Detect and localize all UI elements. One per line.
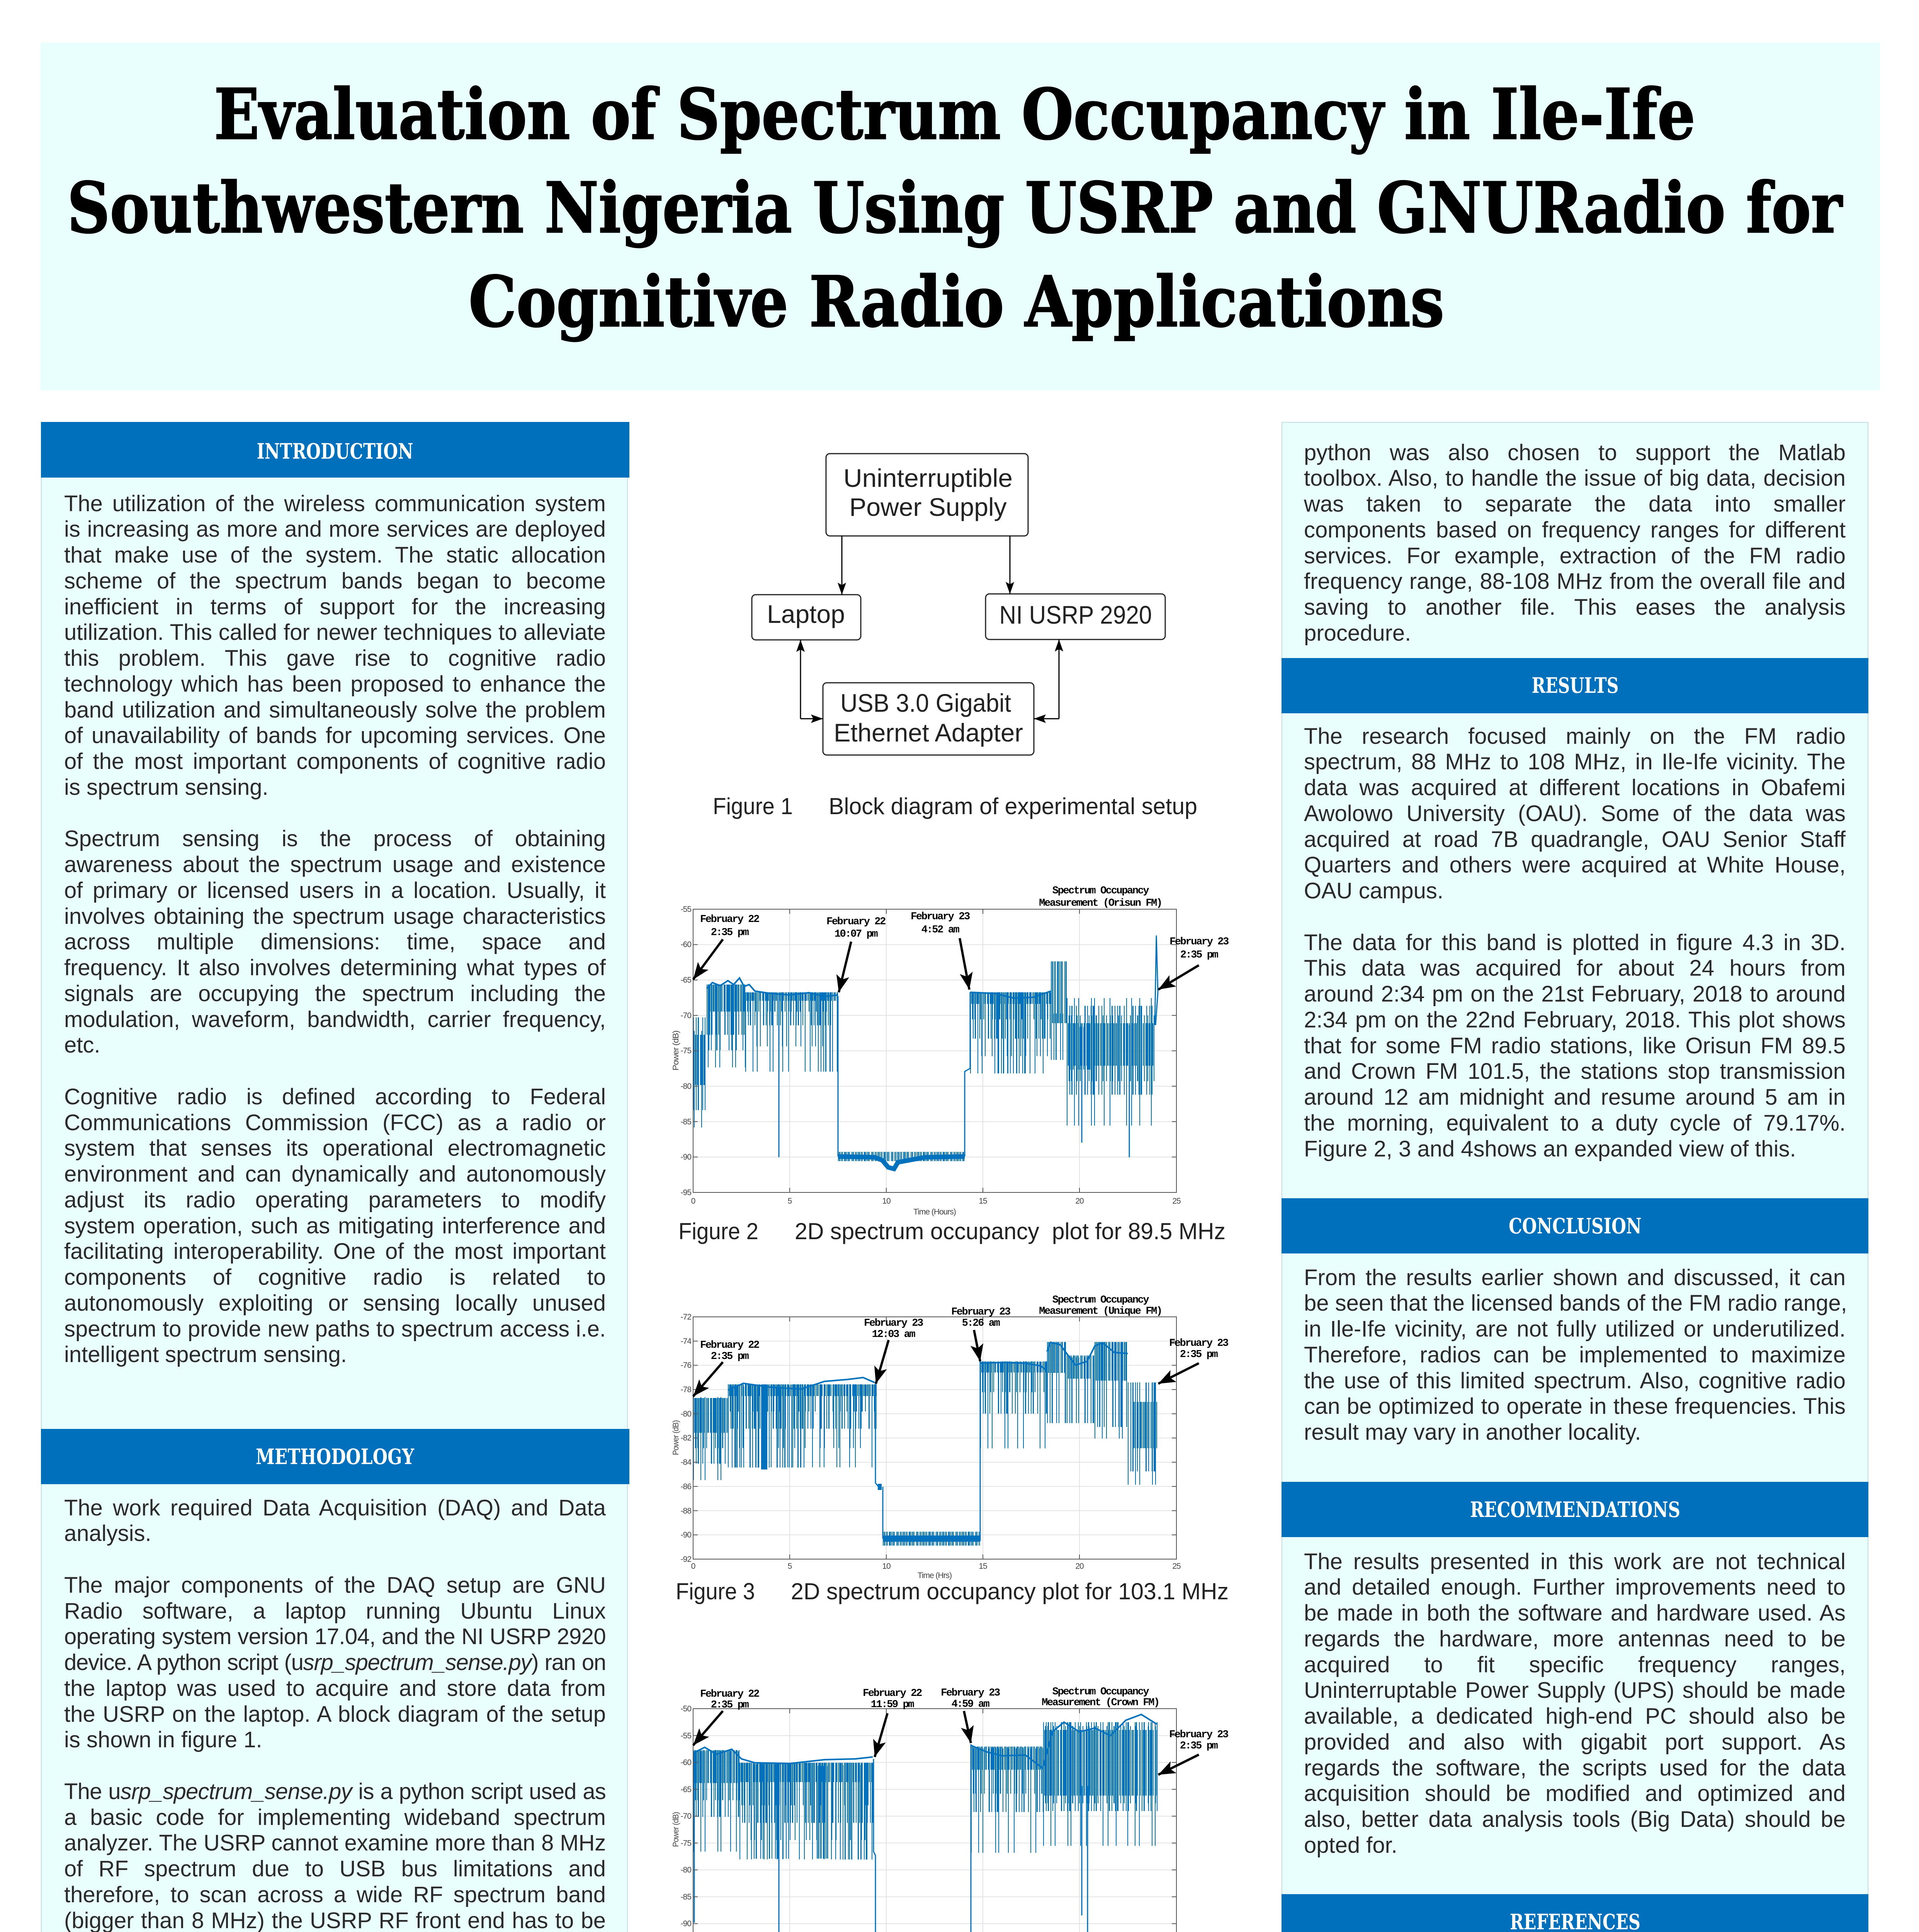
results text: around 2:34 pm on the 21st February, 2018 to around <box>1304 981 1846 1007</box>
axis labels: 25 <box>1172 1197 1181 1206</box>
box: uninterruptible power supply <box>826 454 1028 536</box>
axis labels: 5 <box>788 1197 792 1206</box>
box: NI USRP 2920 <box>986 594 1165 639</box>
arrow: USRP to adapter <box>1034 718 1059 719</box>
recommendations text: regards the hardware, more antennas need to be <box>1304 1626 1846 1651</box>
methodology continued text <box>1304 440 1846 646</box>
recommendations text: regards the software, the scripts used for the data <box>1304 1755 1846 1781</box>
results text: Quarters and others were acquired at White House, <box>1304 852 1846 878</box>
axis labels: -84 <box>681 1458 692 1467</box>
annotations and arrows: February 23 <box>941 1687 1000 1699</box>
panel: references <box>1282 1894 1868 1932</box>
panel: introduction <box>41 422 628 1429</box>
introduction text: this problem. This gave rise to cognitive radio <box>64 646 606 671</box>
methodology text <box>64 1495 606 1932</box>
methodology text: analysis. <box>64 1521 151 1546</box>
conclusion text: the use of this limited spectrum. Also, cognitive radio <box>1304 1368 1846 1393</box>
introduction text: frequency. It also involves determining what types of <box>64 955 606 980</box>
caption: figure 1: Block diagram of experimental setup <box>829 793 1197 819</box>
results text: acquired at road 7B quadrangle, OAU Senior Staff <box>1304 827 1846 852</box>
introduction text: Spectrum sensing is the process of obtaining <box>64 826 606 851</box>
axis labels: 10 <box>882 1562 891 1571</box>
axis labels: -80 <box>681 1866 691 1874</box>
caption: figure 3: 2D spectrum occupancy plot for 103.1 MHz <box>791 1578 1229 1604</box>
box: laptop: Laptop <box>767 600 845 628</box>
introduction text <box>64 491 606 1368</box>
methodology text: a basic code for implementing wideband spectrum <box>64 1804 606 1830</box>
methodology continued text: was taken to separate the data into smaller <box>1304 492 1846 517</box>
axis labels: Power (dB) <box>671 1812 680 1847</box>
annotations and arrows: February 23 <box>864 1318 923 1329</box>
methodology continued text: toolbox. Also, to handle the issue of big data, decision <box>1304 466 1846 491</box>
methodology text: The work required Data Acquisition (DAQ) and Data <box>64 1495 606 1520</box>
introduction text: system operation, such as mitigating interference and <box>64 1213 606 1238</box>
annotations and arrows: Spectrum Occupancy <box>1052 1294 1149 1306</box>
box: USB ethernet adapter <box>823 683 1034 755</box>
introduction text: environment and can dynamically and autonomously <box>64 1162 606 1187</box>
results text: spectrum, 88 MHz to 108 MHz, in Ile-Ife vicinity. The <box>1304 749 1846 774</box>
title banner: Cognitive Radio Applications <box>469 261 1444 343</box>
recommendations text: provided and also with gigabit port support. As <box>1304 1730 1846 1755</box>
axis labels: -80 <box>681 1082 691 1091</box>
arrow: laptop to adapter <box>801 718 823 719</box>
annotations and arrows: Measurement (Crown FM) <box>1042 1697 1159 1709</box>
axis labels: -82 <box>681 1434 691 1442</box>
methodology text: is shown in figure 1. <box>64 1727 262 1752</box>
annotations and arrows: February 22 <box>700 1689 759 1700</box>
axis labels: -50 <box>681 1704 691 1713</box>
data trace <box>693 1342 1158 1541</box>
axis labels <box>671 1313 1181 1580</box>
figure 3: 2D plot 103.1 MHz <box>671 1294 1228 1580</box>
introduction text: awareness about the spectrum usage and existence <box>64 852 606 877</box>
annotations and arrows: February 22 <box>863 1688 922 1699</box>
methodology text: The usrp_spectrum_sense.py is a python script used as <box>64 1779 606 1804</box>
annotations and arrows: Spectrum Occupancy <box>1052 1686 1149 1698</box>
recommendations text <box>1304 1549 1846 1859</box>
box: USB ethernet adapter: Ethernet Adapter <box>834 718 1023 747</box>
panel: introduction: INTRODUCTION <box>257 439 413 464</box>
methodology continued text: procedure. <box>1304 621 1411 646</box>
recommendations text: opted for. <box>1304 1833 1397 1858</box>
introduction text: facilitating interoperability. One of the most important <box>64 1239 606 1264</box>
axis labels <box>671 1704 1181 1932</box>
introduction text: The utilization of the wireless communication system <box>64 491 606 516</box>
results text: that for some FM radio stations, like Orisun FM 89.5 <box>1304 1033 1846 1058</box>
introduction text: etc. <box>64 1032 100 1058</box>
arrow: UPS to laptop <box>841 536 842 595</box>
axis labels: -88 <box>681 1507 691 1515</box>
recommendations text: be made in both the software and hardware used. As <box>1304 1600 1846 1626</box>
results text: The research focused mainly on the FM radio <box>1304 723 1846 749</box>
box: NI USRP 2920: NI USRP 2920 <box>999 600 1152 629</box>
results text: data was acquired at different locations in Obafemi <box>1304 775 1846 800</box>
results text: Figure 2, 3 and 4shows an expanded view of this. <box>1304 1136 1796 1162</box>
panel: methodology: METHODOLOGY <box>256 1444 415 1469</box>
annotations and arrows: 2:35 pm <box>1180 949 1219 961</box>
annotations and arrows: 5:26 am <box>962 1318 1000 1329</box>
axis labels: Power (dB) <box>671 1420 680 1455</box>
conclusion text: can be optimized to operate in these frequencies. This <box>1304 1394 1846 1419</box>
methodology text: Radio software, a laptop running Ubuntu Linux <box>64 1598 606 1624</box>
annotations and arrows: 2:35 pm <box>711 1699 749 1711</box>
annotations and arrows: February 23 <box>1169 936 1229 948</box>
introduction text: inefficient in terms of support for the increasing <box>64 594 606 619</box>
panel: conclusion: CONCLUSION <box>1509 1213 1642 1238</box>
introduction text: technology which has been proposed to enhance the <box>64 672 606 697</box>
methodology text: device. A python script (usrp_spectrum_sense.py) ran on <box>64 1650 606 1675</box>
annotations and arrows: February 23 <box>951 1306 1010 1318</box>
axis labels: -95 <box>681 1188 691 1197</box>
recommendations text: and detailed enough. Further improvements need to <box>1304 1575 1846 1600</box>
methodology text: the laptop was used to acquire and store data from <box>64 1676 606 1701</box>
annotations and arrows: 2:35 pm <box>711 927 749 939</box>
annotations and arrows: 2:35 pm <box>711 1351 749 1362</box>
annotations and arrows: 10:07 pm <box>835 929 878 940</box>
results text: The data for this band is plotted in figure 4.3 in 3D. <box>1304 930 1846 955</box>
caption: figure 1: Figure 1 <box>713 793 793 819</box>
annotations and arrows: 11:59 pm <box>871 1699 914 1711</box>
introduction text: is increasing as more and more services are deployed <box>64 517 606 542</box>
axis labels: -78 <box>681 1385 691 1394</box>
axes and frame <box>693 1317 1176 1559</box>
introduction text: of primary or licensed users in a location. Usually, it <box>64 878 606 903</box>
axis labels <box>671 905 1181 1216</box>
methodology continued text: frequency range, 88-108 MHz from the overall file and <box>1304 569 1846 594</box>
recommendations text: acquired to fit specific frequency ranges, <box>1304 1652 1846 1677</box>
annotations and arrows: Spectrum Occupancy <box>1052 885 1149 897</box>
data trace <box>693 935 1158 1169</box>
introduction text: utilization. This called for newer techniques to alleviate <box>64 620 606 645</box>
caption: figure 3: Figure 3 <box>676 1578 755 1604</box>
box: USB ethernet adapter: USB 3.0 Gigabit <box>840 689 1011 717</box>
introduction text: scheme of the spectrum bands began to become <box>64 568 606 594</box>
axes and frame <box>693 1709 1176 1932</box>
annotations and arrows: 2:35 pm <box>1180 1349 1218 1361</box>
introduction text: intelligent spectrum sensing. <box>64 1342 347 1367</box>
results text: the morning, equivalent to a duty cycle of 79.17%. <box>1304 1111 1846 1136</box>
panel: conclusion <box>1282 1198 1868 1482</box>
arrow: UPS to USRP <box>1009 536 1011 594</box>
arrow: adapter to laptop <box>800 640 801 719</box>
axis labels: Power (dB) <box>671 1031 680 1070</box>
axis labels: 25 <box>1172 1562 1181 1571</box>
methodology continued text: saving to another file. This eases the analysis <box>1304 595 1846 620</box>
axis labels: -75 <box>681 1046 691 1055</box>
axis labels: -60 <box>681 1758 691 1767</box>
axis labels: 15 <box>979 1197 987 1206</box>
axis labels: -65 <box>681 976 691 985</box>
axis labels: -55 <box>681 1731 691 1740</box>
axis labels: -60 <box>681 940 691 949</box>
title banner <box>41 43 1880 390</box>
axis labels: -70 <box>681 1011 691 1020</box>
methodology continued text: python was also chosen to support the Matlab <box>1304 440 1846 465</box>
recommendations text: The results presented in this work are not technical <box>1304 1549 1846 1574</box>
axis labels: -92 <box>681 1555 691 1564</box>
caption: figure 2: Figure 2 <box>678 1218 758 1244</box>
methodology text: operating system version 17.04, and the NI USRP 2920 <box>64 1624 606 1649</box>
results text: Awolowo University (OAU). Some of the data was <box>1304 801 1846 826</box>
figure 4: 2D plot 101.5 MHz <box>671 1686 1228 1932</box>
conclusion text: be seen that the licensed bands of the FM radio range, <box>1304 1291 1847 1316</box>
introduction text: components of cognitive radio is related to <box>64 1265 606 1290</box>
panel: methodology continued <box>1282 422 1868 658</box>
results text: 2:34 pm on the 22nd February, 2018. This plot shows <box>1304 1007 1846 1032</box>
panel: results <box>1282 658 1868 1198</box>
annotations and arrows: 4:59 am <box>952 1699 990 1710</box>
conclusion text: Therefore, radios can be implemented to maximize <box>1304 1342 1846 1367</box>
axis labels: Time (Hrs) <box>918 1571 952 1580</box>
axis labels: -90 <box>681 1919 691 1928</box>
annotations and arrows <box>693 1294 1228 1396</box>
results text: and Crown FM 101.5, the stations stop transmission <box>1304 1059 1846 1084</box>
annotations and arrows <box>693 1686 1228 1775</box>
introduction text: Cognitive radio is defined according to Federal <box>64 1084 606 1109</box>
axis labels: -74 <box>681 1337 692 1346</box>
data trace <box>693 1714 1158 1932</box>
methodology text: the USRP on the laptop. A block diagram of the setup <box>64 1702 606 1726</box>
conclusion text: From the results earlier shown and discussed, it can <box>1304 1265 1846 1290</box>
panel: recommendations: RECOMMENDATIONS <box>1470 1497 1680 1522</box>
introduction text: signals are occupying the spectrum including the <box>64 981 606 1006</box>
annotations and arrows: Measurement (Unique FM) <box>1039 1306 1162 1317</box>
axis labels: -55 <box>681 905 691 914</box>
box: uninterruptible power supply: Power Supply <box>849 493 1007 521</box>
axis labels: -90 <box>681 1153 691 1162</box>
methodology continued text: components based on frequency ranges for different <box>1304 517 1846 543</box>
axis labels: -76 <box>681 1361 691 1370</box>
box: uninterruptible power supply: Uninterruptible <box>843 464 1013 492</box>
results text: OAU campus. <box>1304 878 1443 903</box>
conclusion text: in Ile-Ife vicinity, are not fully utilized or underutilized. <box>1304 1316 1846 1342</box>
recommendations text: available, a dedicated high-end PC should also be <box>1304 1704 1846 1729</box>
introduction text: across multiple dimensions: time, space and <box>64 929 606 954</box>
axis labels: 10 <box>882 1197 891 1206</box>
introduction text: adjust its radio operating parameters to modify <box>64 1187 606 1213</box>
annotations and arrows: February 22 <box>700 1340 759 1351</box>
annotations and arrows: 4:52 am <box>921 924 960 936</box>
methodology text: The major components of the DAQ setup are GNU <box>64 1573 606 1598</box>
axis labels: Time (Hours) <box>913 1208 956 1216</box>
panel: recommendations <box>1282 1482 1868 1894</box>
introduction text: Communications Commission (FCC) as a radio or <box>64 1110 606 1135</box>
methodology continued text: services. For example, extraction of the FM radio <box>1304 543 1846 568</box>
conclusion text: result may vary in another locality. <box>1304 1420 1641 1445</box>
axis labels: 0 <box>691 1197 695 1206</box>
axis labels: -80 <box>681 1410 691 1418</box>
annotations and arrows: 12:03 am <box>872 1329 915 1340</box>
axis labels: 20 <box>1075 1562 1084 1571</box>
axis labels: 15 <box>979 1562 987 1571</box>
results text: around 12 am midnight and resume around 5 am in <box>1304 1085 1846 1110</box>
axis labels: 20 <box>1075 1197 1084 1206</box>
introduction text: is spectrum sensing. <box>64 775 269 800</box>
annotations and arrows <box>693 885 1229 992</box>
axis labels: -65 <box>681 1785 691 1794</box>
methodology text: of RF spectrum due to USB bus limitations and <box>64 1856 606 1881</box>
annotations and arrows: February 22 <box>826 916 886 928</box>
annotations and arrows: February 22 <box>700 914 759 925</box>
recommendations text: Uninterruptable Power Supply (UPS) should be made <box>1304 1678 1846 1703</box>
box: laptop <box>752 595 861 640</box>
axis labels: -70 <box>681 1812 691 1821</box>
figure 2: 2D plot 89.5 MHz <box>671 885 1229 1216</box>
results text: This data was acquired for about 24 hours from <box>1304 956 1846 981</box>
figure 1: block diagram <box>713 454 1197 819</box>
panel: results: RESULTS <box>1531 673 1619 698</box>
results text <box>1304 723 1846 1162</box>
annotations and arrows: February 23 <box>911 911 970 923</box>
axes and frame <box>693 909 1176 1192</box>
introduction text: of unavailability of bands for upcoming services. One <box>64 723 606 748</box>
caption: figure 2: 2D spectrum occupancy plot for 89.5 MHz <box>795 1218 1226 1244</box>
introduction text: band utilization and simultaneously solve the problem <box>64 697 606 723</box>
methodology text: therefore, to scan across a wide RF spectrum band <box>64 1882 606 1907</box>
axis labels: -90 <box>681 1531 691 1539</box>
annotations and arrows: 2:35 pm <box>1180 1740 1218 1752</box>
introduction text: involves obtaining the spectrum usage characteristics <box>64 903 606 929</box>
annotations and arrows: February 23 <box>1169 1729 1228 1741</box>
introduction text: modulation, waveform, bandwidth, carrier frequency, <box>64 1007 606 1032</box>
recommendations text: acquisition should be modified and optimized and <box>1304 1781 1846 1806</box>
conclusion text <box>1304 1265 1846 1446</box>
introduction text: that make use of the system. The static allocation <box>64 543 606 568</box>
axis labels: -72 <box>681 1313 691 1321</box>
introduction text: autonomously exploiting or sensing locally unused <box>64 1291 606 1316</box>
axis labels: -85 <box>681 1117 691 1126</box>
introduction text: system that senses its operational electromagnetic <box>64 1136 606 1161</box>
panel: methodology <box>41 1429 628 1932</box>
axis labels: -85 <box>681 1893 691 1901</box>
axis labels: -86 <box>681 1482 691 1491</box>
annotations and arrows: February 23 <box>1169 1338 1228 1349</box>
introduction text: of the most important components of cognitive radio <box>64 749 606 774</box>
recommendations text: also, better data analysis tools (Big Data) should be <box>1304 1807 1846 1832</box>
axis labels: 0 <box>691 1562 695 1571</box>
axis labels: 5 <box>788 1562 792 1571</box>
annotations and arrows: Measurement (Orisun FM) <box>1039 898 1162 909</box>
methodology text: analyzer. The USRP cannot examine more than 8 MHz <box>64 1830 606 1855</box>
introduction text: spectrum to provide new paths to spectrum access i.e. <box>64 1316 606 1342</box>
axis labels: -75 <box>681 1839 691 1848</box>
